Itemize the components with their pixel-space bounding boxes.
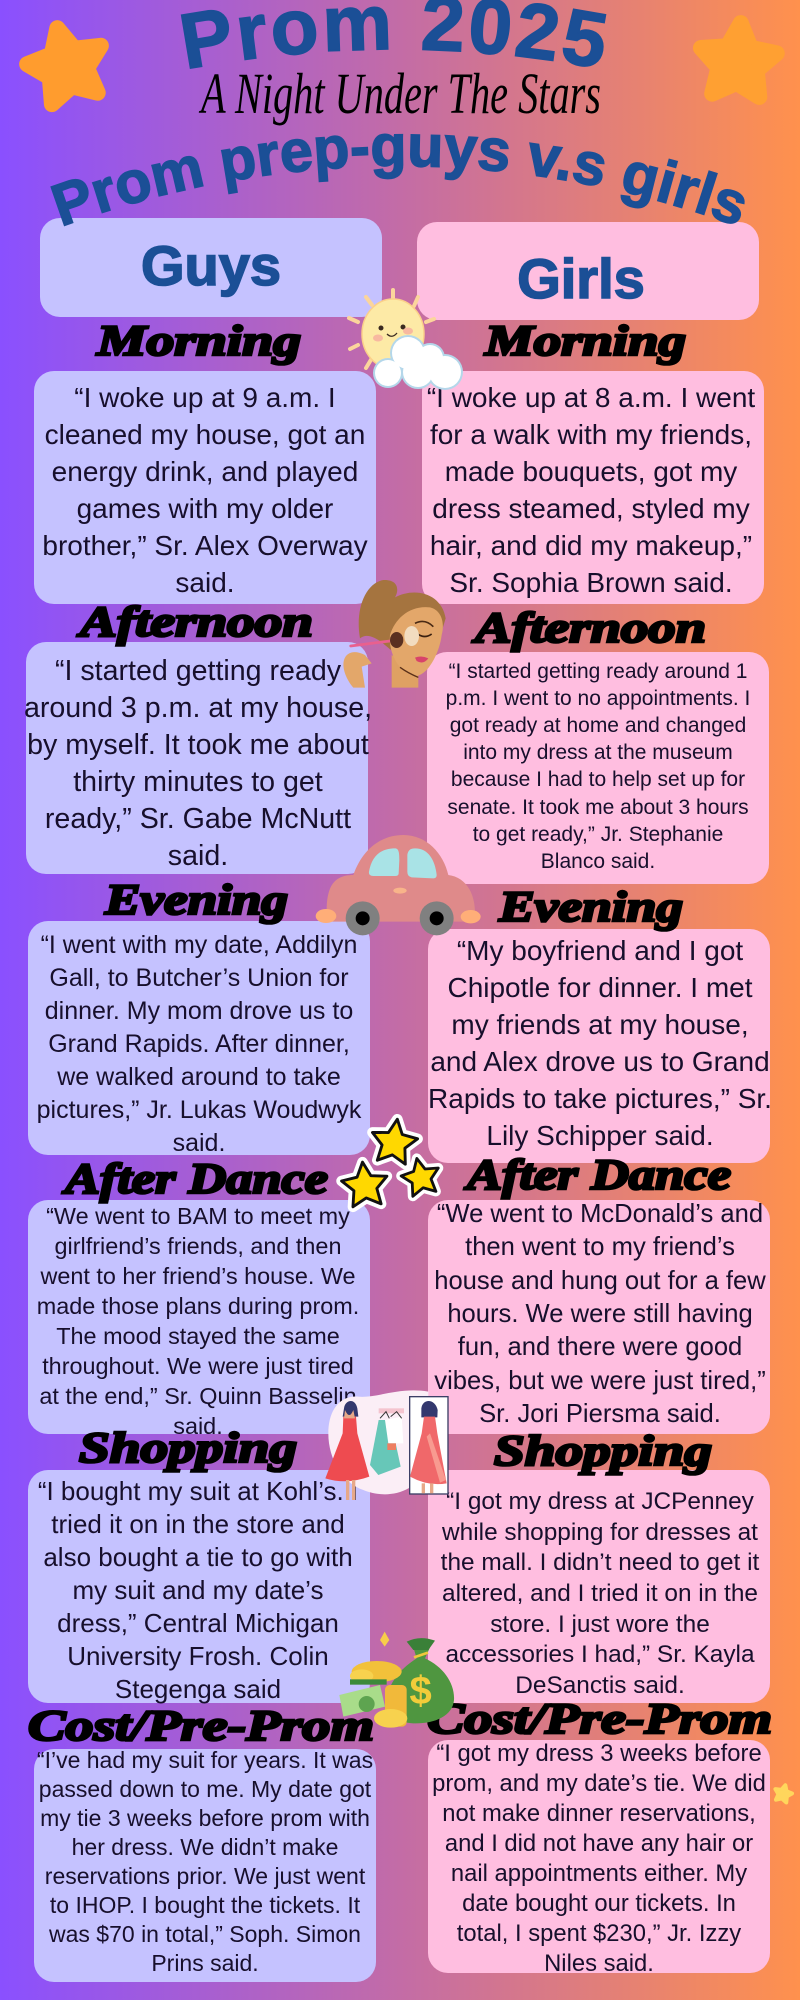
icon: woman applying makeup [343,580,446,688]
panel: guys shopping: University Frosh. Colin [67,1641,329,1671]
panel: girls after dance: house and hung out for a few [434,1267,766,1295]
icon: sun behind cloud [349,290,463,390]
panel: guys cost [34,1747,376,1982]
panel: guys cost: Prins said. [151,1950,259,1976]
panel: girls morning: “I woke up at 8 a.m. I went [427,382,755,413]
panel: girls header: Girls [517,247,645,310]
heading: guys morning: Morning [96,318,301,365]
icon: right orange star [698,20,779,98]
panel: guys after dance: at the end,” Sr. Quinn Basselin [39,1383,357,1409]
panel: girls cost: date bought our tickets. In [462,1890,736,1917]
panel: girls cost: total, I spent $230,” Jr. Izzy [457,1920,741,1947]
panel: guys evening: Gall, to Butcher’s Union for [49,964,349,992]
panel: girls evening: Rapids to take pictures,” Sr. [428,1083,772,1114]
panel: girls shopping: the mall. I didn’t need to get it [441,1549,760,1576]
panel: girls after dance: Sr. Jori Piersma said. [479,1400,721,1428]
heading: prom prep: Prom prep-guys v.s girls [50,134,745,226]
panel: guys afternoon: “I started getting ready [55,655,342,687]
panel: girls after dance: fun, and there were good [458,1333,742,1361]
panel: guys shopping: dress,” Central Michigan [57,1608,339,1638]
subtitle: A Night Under The Stars [198,61,601,126]
panel: girls afternoon: senate. It took me about 3 hours [447,796,749,819]
icon: dresses and mirror [325,1390,448,1500]
panel: girls afternoon [427,652,769,884]
heading: guys cost: Cost/Pre-Prom [28,1703,374,1750]
panel: guys evening: Grand Rapids. After dinner, [48,1030,350,1058]
panel: guys shopping: tried it on in the store and [51,1509,345,1539]
panel: guys shopping: Stegenga said [115,1674,281,1704]
heading: guys evening: Evening [104,877,288,924]
panel: girls cost: prom, and my date’s tie. We did [432,1770,766,1797]
panel: guys cost: reservations prior. We just went [45,1863,366,1889]
panel: girls afternoon: into my dress at the museum [463,741,733,764]
panel: guys header: Guys [141,234,281,297]
panel: girls morning: Sr. Sophia Brown said. [449,567,733,598]
panel: guys shopping: also bought a tie to go with [43,1542,353,1572]
icon: yellow stars [340,1116,443,1208]
panel: guys after dance: said. [173,1413,223,1439]
panel: guys cost: to IHOP. I bought the tickets. It [50,1892,361,1918]
panel: guys after dance: went to her friend’s house. We [39,1263,356,1289]
panel: girls morning: for a walk with my friends, [430,419,752,450]
panel: girls evening: “My boyfriend and I got [457,935,743,966]
panel: girls afternoon: Blanco said. [541,850,655,873]
panel: girls shopping: DeSanctis said. [515,1672,685,1699]
panel: guys shopping: “I bought my suit at Kohl’s. I [38,1476,358,1506]
panel: girls afternoon: p.m. I went to no appointments. I [446,687,750,710]
panel: guys shopping: my suit and my date’s [73,1575,323,1605]
panel: guys after dance: The mood stayed the same [56,1323,340,1349]
panel: guys morning [34,371,376,604]
panel: guys evening [28,921,370,1157]
panel: guys morning: energy drink, and played [52,456,358,487]
icon: money bag and coins [339,1632,454,1728]
panel: guys evening: we walked around to take [56,1063,341,1091]
panel: girls shopping: altered, and I tried it on in the [442,1580,758,1607]
panel: guys morning: brother,” Sr. Alex Overway [42,530,368,561]
panel: girls shopping: “I got my dress at JCPenney [446,1488,755,1515]
heading: guys afternoon: Afternoon [76,599,313,646]
icon: small yellow star [773,1783,794,1803]
panel: girls shopping: store. I just wore the [490,1611,710,1638]
panel: guys afternoon [24,642,372,874]
panel: girls cost: Niles said. [544,1950,654,1977]
heading: guys after dance: After Dance [61,1156,328,1203]
panel: guys afternoon: said. [168,840,228,872]
panel: guys after dance: “We went to BAM to meet my [46,1203,350,1229]
panel: guys after dance: girlfriend’s friends, and then [55,1233,341,1259]
panel: girls shopping: accessories I had,” Sr. Kayla [445,1641,755,1668]
heading: girls evening: Evening [498,884,683,931]
panel: girls after dance [428,1200,770,1434]
panel: guys morning: cleaned my house, got an [45,419,365,450]
panel: girls evening [428,929,772,1163]
panel: guys shopping [28,1470,370,1704]
panel: girls after dance: vibes, but we were just tired,” [434,1367,766,1395]
panel: girls cost [428,1740,770,1977]
panel: guys morning: said. [175,567,235,598]
panel: girls evening: my friends at my house, [451,1009,749,1040]
panel: guys cost: was $70 in total,” Soph. Simon [48,1921,361,1947]
panel: guys morning: games with my older [77,493,333,524]
heading: girls cost: Cost/Pre-Prom [427,1696,772,1743]
heading: girls shopping: Shopping [494,1428,712,1475]
icon: car [316,835,481,935]
panel: guys header [40,218,382,317]
panel: girls afternoon: because I had to help set up for [451,768,745,791]
panel: girls morning: hair, and did my makeup,” [430,530,752,561]
panel: guys morning: “I woke up at 9 a.m. I [74,382,336,413]
panel: guys cost: passed down to me. My date got [39,1776,372,1802]
panel: girls afternoon: “I started getting ready around 1 [449,660,747,683]
panel: guys evening: pictures,” Jr. Lukas Woudwyk [37,1096,362,1124]
panel: girls shopping [428,1470,770,1703]
panel: girls cost: and I did not have any hair or [445,1830,753,1857]
panel: guys after dance: throughout. We were just tired [42,1353,354,1379]
panel: guys afternoon: by myself. It took me about [27,729,369,761]
icon: money bag and coins: $ [410,1669,432,1713]
panel: girls header [417,222,759,320]
panel: girls after dance: then went to my friend’s [465,1233,735,1261]
panel: girls cost: “I got my dress 3 weeks before [436,1740,762,1767]
panel: girls morning: dress steamed, styled my [432,493,750,524]
heading: girls afternoon: Afternoon [471,605,706,652]
panel: guys afternoon: around 3 p.m. at my house, [24,692,372,724]
panel: girls afternoon: got ready at home and changed [450,714,746,737]
icon: left orange star [20,19,112,108]
panel: guys evening: said. [173,1129,225,1157]
panel: girls morning [422,371,764,604]
panel: guys evening: dinner. My mom drove us to [45,997,353,1025]
panel: girls evening: Chipotle for dinner. I met [447,972,753,1003]
panel: guys after dance: made those plans during prom. [37,1293,359,1319]
heading: guys shopping: Shopping [79,1425,297,1472]
panel: girls shopping: while shopping for dresses at [441,1519,758,1546]
panel: girls cost: not make dinner reservations, [442,1800,756,1827]
panel: girls cost: nail appointments either. My [451,1860,747,1887]
panel: guys afternoon: ready,” Sr. Gabe McNutt [45,803,351,835]
panel: guys after dance [28,1200,370,1439]
panel: girls after dance: hours. We were still having [447,1300,753,1328]
panel: guys cost: her dress. We didn’t make [72,1834,338,1860]
panel: girls evening: and Alex drove us to Grand [430,1046,770,1077]
panel: girls morning: made bouquets, got my [445,456,737,487]
panel: guys evening: “I went with my date, Addilyn [41,931,357,959]
heading: girls morning: Morning [484,318,686,365]
heading: girls after dance: After Dance [463,1152,731,1199]
panel: guys afternoon: thirty minutes to get [73,766,323,798]
panel: guys cost: my tie 3 weeks before prom with [40,1805,370,1831]
panel: girls evening: Lily Schipper said. [486,1120,714,1151]
panel: guys cost: “I’ve had my suit for years. It was [37,1747,373,1773]
panel: girls afternoon: to get ready,” Jr. Stephanie [473,823,723,846]
panel: girls after dance: “We went to McDonald’s and [437,1200,763,1228]
